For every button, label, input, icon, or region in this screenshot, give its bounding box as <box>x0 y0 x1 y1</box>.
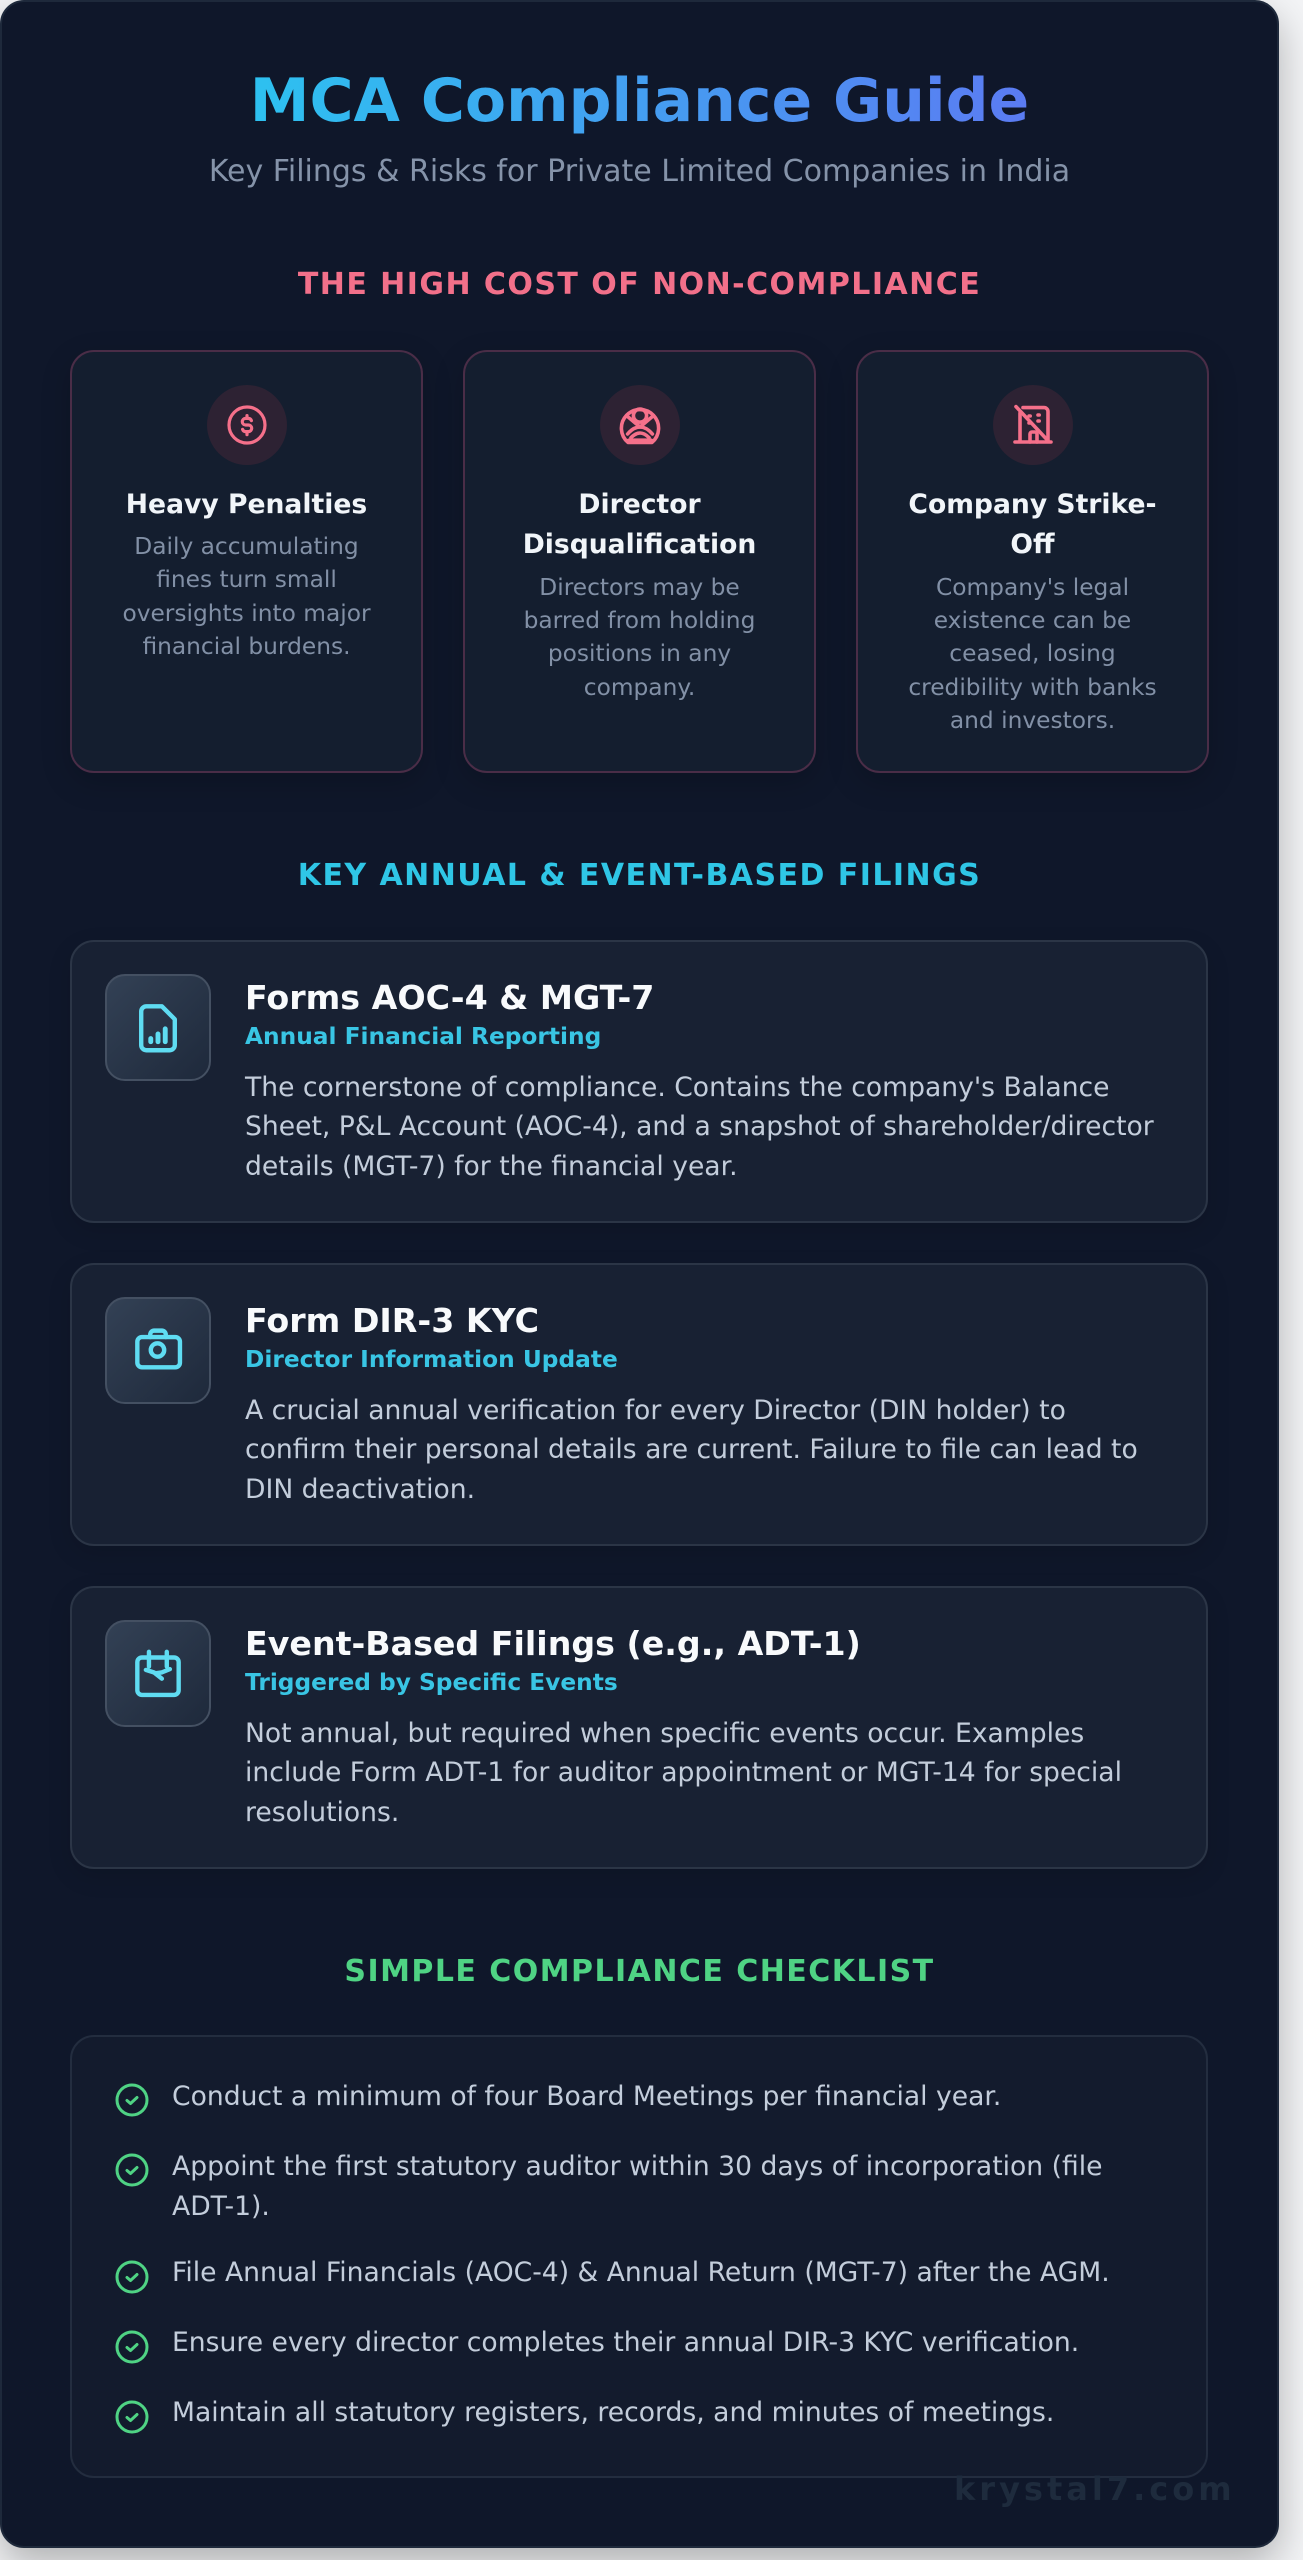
item text <box>172 2151 1102 2222</box>
card text: oversights into major <box>122 600 371 627</box>
filing heading: Event-Based Filings (e.g., ADT-1) <box>245 1624 861 1662</box>
card text: Daily accumulating <box>134 533 359 560</box>
filing text: confirm their personal details are current. Failure to file can lead to <box>245 1434 1138 1465</box>
panel: AOC-4 and MGT-7 <box>70 940 1208 1223</box>
icon: check <box>116 2330 148 2364</box>
card text: ceased, losing <box>949 640 1116 667</box>
icon: person in circle <box>600 385 680 465</box>
title: MCA Compliance Guide <box>250 66 1029 136</box>
item 2 <box>116 2151 1102 2222</box>
card text: and investors. <box>950 707 1115 734</box>
filing text: The cornerstone of compliance. Contains the company's Balance <box>245 1072 1110 1102</box>
filing text: include Form ADT-1 for auditor appointment or MGT-14 for special <box>245 1757 1122 1788</box>
card heading: Director <box>578 489 701 520</box>
filing heading: Form DIR-3 KYC <box>245 1300 539 1340</box>
item text: Appoint the first statutory auditor within 30 days of incorporation (file <box>172 2151 1102 2182</box>
panel: director disqualification <box>463 350 816 773</box>
card text <box>524 574 755 701</box>
item text: Maintain all statutory registers, records, and minutes of meetings. <box>172 2397 1054 2428</box>
item text: ADT-1). <box>172 2191 270 2222</box>
icon: calendar <box>105 1620 211 1727</box>
card text: credibility with banks <box>908 674 1157 701</box>
card text: company. <box>584 674 695 701</box>
card heading: Disqualification <box>523 529 756 560</box>
card text: financial burdens. <box>142 633 351 660</box>
card text: positions in any <box>548 640 731 667</box>
filing text <box>245 1394 1138 1505</box>
section heading: filings: KEY ANNUAL & EVENT-BASED FILINGS <box>298 858 981 893</box>
icon: building crossed out <box>992 385 1072 465</box>
card heading: Off <box>1010 529 1055 560</box>
icon: check <box>116 2154 148 2186</box>
filing subheading: Annual Financial Reporting <box>245 1022 601 1050</box>
item text: Ensure every director completes their annual DIR-3 KYC verification. <box>172 2327 1079 2358</box>
card heading <box>908 489 1157 560</box>
item text: Conduct a minimum of four Board Meetings per financial year. <box>172 2080 1001 2112</box>
card heading: Company Strike- <box>908 489 1157 520</box>
panel: company strike-off <box>856 350 1209 773</box>
item text: File Annual Financials (AOC-4) & Annual Return (MGT-7) after the AGM. <box>172 2257 1110 2288</box>
item 3 <box>116 2257 1110 2294</box>
icon: report file <box>105 974 211 1081</box>
item 1 <box>116 2080 1001 2116</box>
filing text: DIN deactivation. <box>245 1474 475 1505</box>
filing heading: Forms AOC-4 & MGT-7 <box>245 978 654 1016</box>
icon: camera <box>105 1297 211 1404</box>
filing text: Not annual, but required when specific events occur. Examples <box>245 1718 1084 1748</box>
filing text <box>244 1072 1154 1182</box>
watermark: krystal7.com <box>954 2470 1236 2508</box>
card text: Directors may be <box>539 574 740 600</box>
card heading <box>523 489 756 560</box>
section heading: non-compliance: THE HIGH COST OF NON-COMPLIANCE <box>298 267 981 302</box>
filing text: resolutions. <box>245 1797 399 1828</box>
card text: fines turn small <box>156 566 337 593</box>
panel: heavy penalties <box>70 350 423 773</box>
card text <box>122 533 371 660</box>
item 5 <box>116 2397 1054 2434</box>
card text: existence can be <box>934 607 1131 634</box>
panel: DIR-3 KYC <box>70 1263 1208 1546</box>
filing text <box>245 1718 1122 1828</box>
icon: check <box>116 2260 148 2294</box>
icon: dollar coin <box>206 385 286 465</box>
filing text: Sheet, P&L Account (AOC-4), and a snapshot of shareholder/director <box>245 1111 1154 1142</box>
filing subheading: Director Information Update <box>245 1346 618 1372</box>
section heading: checklist: SIMPLE COMPLIANCE CHECKLIST <box>344 1954 935 1989</box>
card text <box>908 574 1157 734</box>
filing subheading: Triggered by Specific Events <box>245 1668 618 1696</box>
icon: check <box>116 2400 148 2434</box>
item 4 <box>116 2327 1079 2364</box>
icon: check <box>116 2084 148 2116</box>
filing text: A crucial annual verification for every Director (DIN holder) to <box>245 1394 1066 1426</box>
card text: Company's legal <box>936 574 1129 600</box>
panel: event-based filings <box>70 1586 1208 1869</box>
card text: barred from holding <box>524 607 755 634</box>
filing text: details (MGT-7) for the financial year. <box>245 1151 738 1182</box>
subtitle: Key Filings & Risks for Private Limited Companies in India <box>209 154 1070 189</box>
card heading: Heavy Penalties <box>126 489 367 520</box>
panel: checklist <box>70 2035 1208 2478</box>
